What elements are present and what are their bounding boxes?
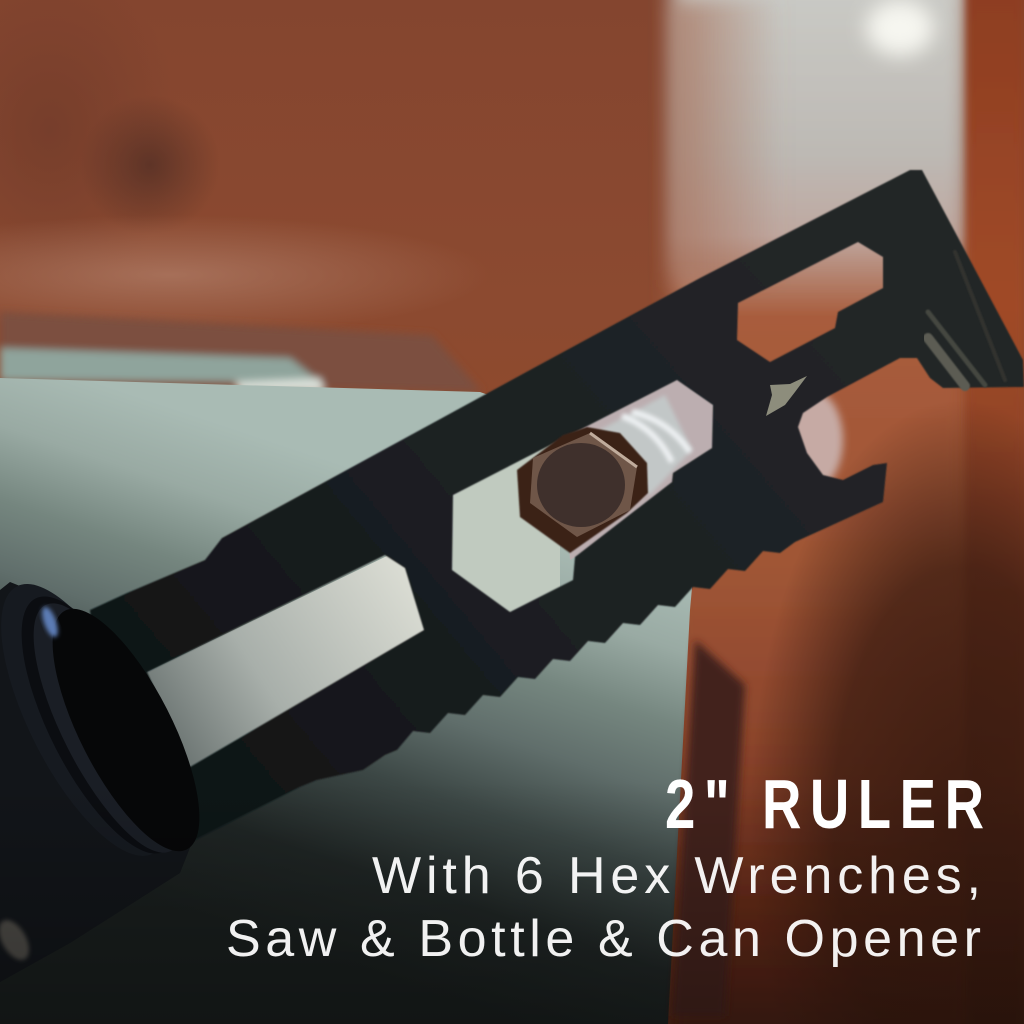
caption: line two: Saw & Bottle & Can Opener bbox=[226, 910, 981, 968]
ruler blade with hex wrench slots, saw and bottle opener bbox=[90, 170, 1024, 845]
caption: line one: With 6 Hex Wrenches, bbox=[372, 847, 981, 905]
caption: heading: 2" RULER bbox=[665, 766, 984, 844]
box flange bbox=[672, 640, 745, 1016]
worn streaks near blade tip bbox=[928, 252, 1005, 386]
black torch handle bbox=[0, 561, 228, 982]
bottom vignette bbox=[0, 780, 1024, 1024]
worn paint mark on blade bbox=[766, 376, 807, 416]
box lid bbox=[0, 312, 482, 392]
rusty bolt bbox=[517, 427, 648, 553]
box body bbox=[0, 378, 700, 1024]
bright tube seen through the slots bbox=[130, 370, 725, 780]
